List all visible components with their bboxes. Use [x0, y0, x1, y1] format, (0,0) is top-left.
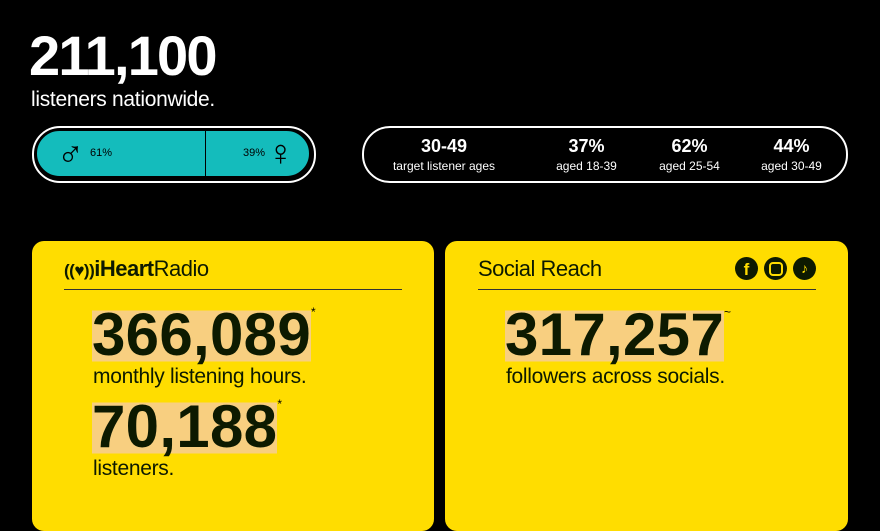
icon: male: ♂ [57, 132, 84, 173]
male percent: 61% [90, 147, 112, 159]
icons: social [735, 257, 816, 280]
gender bar [32, 126, 316, 183]
age stats pill [362, 126, 848, 183]
stat: followers: 317,257~ [505, 301, 731, 368]
stat: 30-49: 30-49 [421, 136, 467, 156]
label: hours: monthly listening hours. [93, 365, 306, 388]
stat: 37%: 37% [568, 136, 605, 156]
stat: 37% [556, 136, 617, 173]
stat: listeners: 70,188* [92, 393, 282, 460]
stat: 30-49: target listener ages [393, 159, 495, 173]
stat: 37%: aged 18-39 [556, 159, 617, 173]
stat: 62%: aged 25-54 [659, 159, 720, 173]
icons: social: f [744, 260, 749, 279]
female percent: 39% [243, 147, 265, 159]
stat: listening hours: 366,089* [92, 301, 316, 368]
stat: 62%: 62% [671, 136, 708, 156]
stat: 44% [761, 136, 822, 173]
logo: iHeartRadio: ((♥))iHeartRadio [64, 256, 209, 281]
label: followers: followers across socials. [506, 365, 725, 388]
icons: social: ♪ [801, 260, 808, 276]
stat: 44%: aged 30-49 [761, 159, 822, 173]
title number: 211,100 [29, 24, 216, 87]
stat: 62% [659, 136, 720, 173]
icon: female: ♀ [267, 132, 294, 173]
heading: Social Reach [478, 256, 602, 281]
stat: 44%: 44% [773, 136, 810, 156]
stat: 30-49 [393, 136, 495, 173]
panel: iHeartRadio [32, 241, 434, 531]
label: listeners: listeners. [93, 457, 174, 480]
subtitle: listeners nationwide. [31, 88, 215, 111]
panel: Social Reach [445, 241, 848, 531]
